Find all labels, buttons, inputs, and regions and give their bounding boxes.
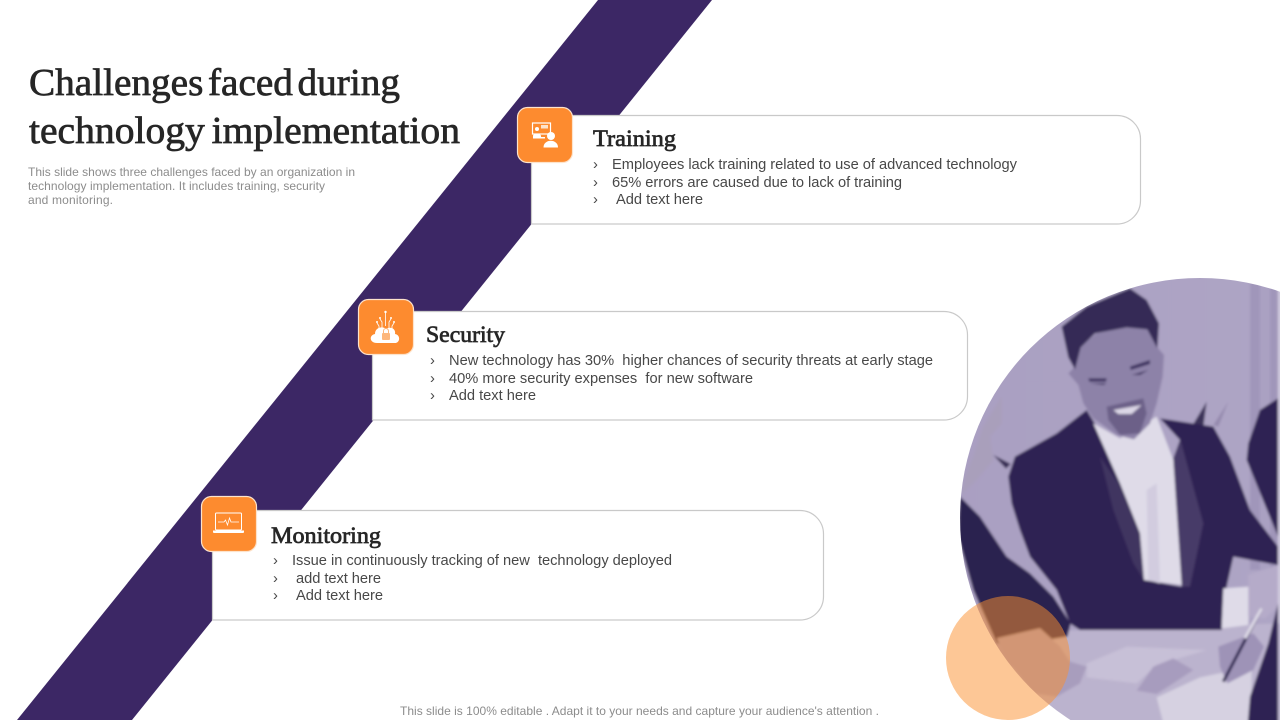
- title: technology implementation: [29, 110, 460, 152]
- description text: and monitoring.: [28, 193, 113, 207]
- icon: laptop pulse: [202, 496, 256, 552]
- training bullets: [593, 157, 1018, 208]
- monitoring heading: Monitoring: [271, 523, 382, 548]
- monitoring bullets: Issue in continuously tracking of new technology deployed: [292, 553, 672, 569]
- description text: technology implementation. It includes training, security: [28, 179, 325, 193]
- title: Challenges faced during: [29, 62, 400, 104]
- monitoring bullets: ›: [273, 588, 278, 604]
- title: [29, 62, 460, 152]
- security bullets: Add text here: [449, 388, 536, 404]
- security bullets: [430, 353, 933, 404]
- training bullets: ›: [593, 192, 598, 208]
- security bullets: ›: [430, 371, 435, 387]
- monitoring card: [212, 510, 824, 620]
- security bullets: New technology has 30% higher chances of security threats at early stage: [449, 353, 933, 369]
- panel: monitoring: [202, 496, 824, 620]
- icon: cloud lock: [358, 300, 414, 354]
- training heading: Training: [593, 126, 677, 151]
- security heading: Security: [426, 322, 506, 347]
- description text: [28, 165, 355, 207]
- footer note: This slide is 100% editable . Adapt it to your needs and capture your audience's attention .: [400, 704, 879, 718]
- training bullets: Add text here: [616, 192, 703, 208]
- monitoring bullets: ›: [273, 553, 278, 569]
- security card: [372, 312, 968, 420]
- training bullets: 65% errors are caused due to lack of training: [612, 175, 902, 191]
- monitoring bullets: Add text here: [296, 588, 383, 604]
- decorative orange circle: [946, 596, 1070, 720]
- panel: training: [518, 108, 1140, 224]
- training card: [532, 116, 1140, 224]
- diagonal purple band: [17, 0, 712, 720]
- training bullets: ›: [593, 175, 598, 191]
- photo: business meeting in purple duotone circle: [940, 270, 1280, 720]
- monitoring bullets: ›: [273, 571, 278, 587]
- icon: presentation trainer: [518, 108, 572, 162]
- training bullets: ›: [593, 157, 598, 173]
- security bullets: 40% more security expenses for new software: [449, 371, 753, 387]
- training bullets: Employees lack training related to use of advanced technology: [612, 157, 1018, 173]
- panel: security: [358, 300, 968, 420]
- description text: This slide shows three challenges faced by an organization in: [28, 165, 355, 179]
- security bullets: ›: [430, 353, 435, 369]
- security bullets: ›: [430, 388, 435, 404]
- monitoring bullets: [273, 553, 672, 604]
- monitoring bullets: add text here: [296, 571, 381, 587]
